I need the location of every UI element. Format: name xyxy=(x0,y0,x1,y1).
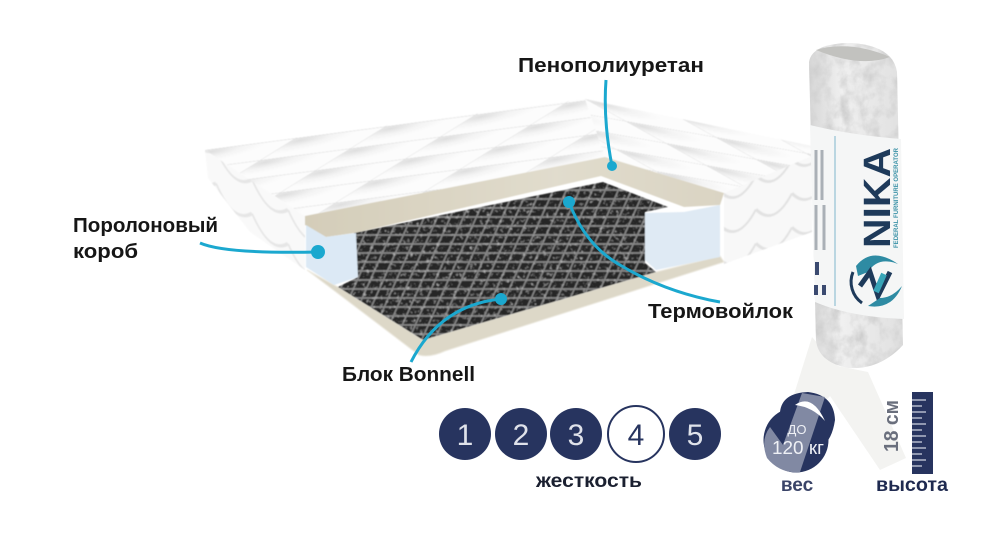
callout dots xyxy=(311,161,617,305)
weight icon xyxy=(764,392,835,472)
firmness 5 xyxy=(669,408,721,460)
right foam box xyxy=(645,205,720,270)
label: foam: Пенополиуретан xyxy=(518,55,704,77)
label: felt: Термовойлок xyxy=(648,301,794,323)
firmness 4: 4 xyxy=(628,419,644,452)
mattress top face left xyxy=(205,99,605,216)
roll xyxy=(809,43,904,368)
firmness 1 xyxy=(439,408,491,460)
mattress right side xyxy=(724,156,812,264)
weight text: ДО xyxy=(788,422,806,437)
mattress top face right xyxy=(585,99,812,193)
callout lines xyxy=(200,80,720,362)
firmness scale xyxy=(439,406,721,462)
height icon xyxy=(912,392,933,474)
firmness 2: 2 xyxy=(513,419,529,452)
weight icon: 120 кг xyxy=(772,438,824,458)
firmness 3: 3 xyxy=(568,419,584,452)
bottom comfort layer xyxy=(307,256,724,356)
label fine print xyxy=(816,150,824,250)
labels xyxy=(73,55,794,386)
spring block speckle xyxy=(338,182,668,340)
reflection shape xyxy=(775,337,906,470)
left foam box xyxy=(306,225,358,285)
roll top end xyxy=(816,46,890,61)
top foam layer xyxy=(305,157,724,237)
firmness 4 xyxy=(608,406,664,462)
height label: высота xyxy=(876,475,948,496)
weight label: вес xyxy=(781,475,814,496)
logo subtitle: FEDERAL FURNITURE OPERATOR xyxy=(893,148,900,248)
firmness 3 xyxy=(550,408,602,460)
label stripe xyxy=(834,136,836,306)
mattress left side xyxy=(205,150,305,270)
height value: 18 см xyxy=(881,400,903,452)
firmness 1: 1 xyxy=(457,419,473,452)
firmness 2 xyxy=(495,408,547,460)
logo mark xyxy=(851,255,902,307)
label: foam box second line: короб xyxy=(73,241,138,263)
logo NIKA: NIKA xyxy=(857,148,899,248)
firmness 5: 5 xyxy=(687,419,703,452)
roll body xyxy=(809,43,903,368)
roll label xyxy=(810,125,904,319)
label icons xyxy=(816,262,824,295)
label: spring block: Блок Bonnell xyxy=(342,364,475,386)
spring block xyxy=(338,182,668,340)
firmness label: жесткость xyxy=(535,471,642,492)
roll marble texture xyxy=(809,43,903,368)
mattress xyxy=(205,99,812,356)
label: foam box: Поролоновый xyxy=(73,215,218,237)
